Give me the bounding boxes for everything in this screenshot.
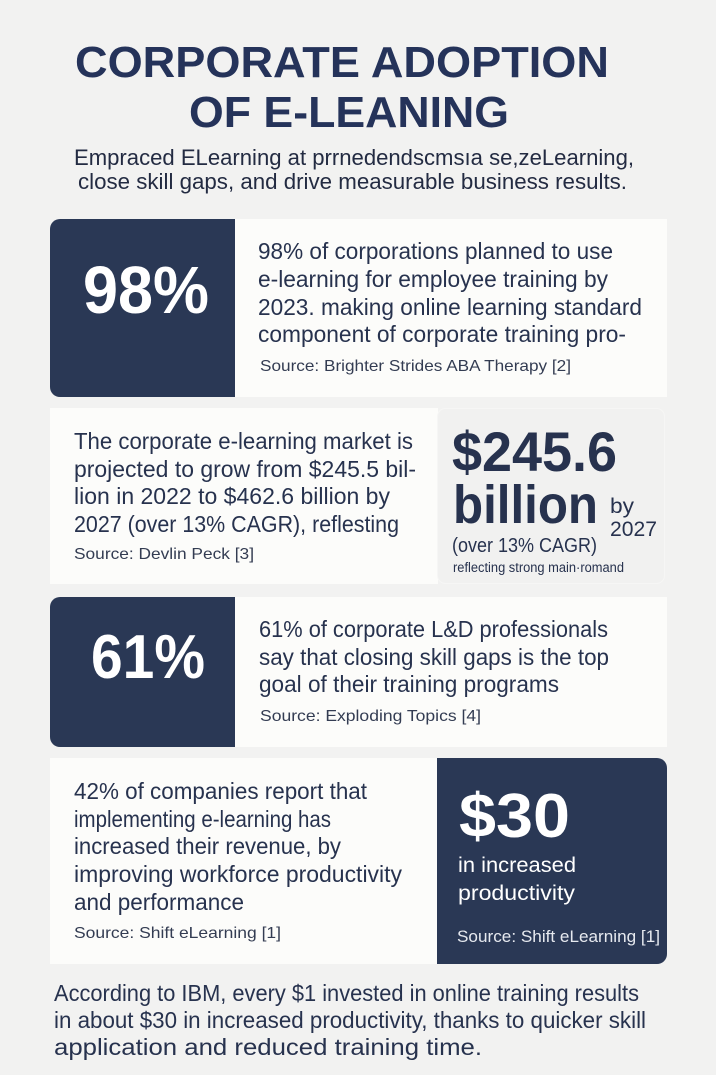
stat block: $245.6 billion: billion	[453, 475, 598, 535]
title	[75, 38, 609, 137]
text block: revenue description: implementing e-learning has	[74, 806, 331, 832]
stat block: $245.6 billion: by	[610, 495, 635, 518]
subtitle	[74, 145, 634, 194]
text block: 61% description: Source: Exploding Topics [4]	[260, 708, 481, 725]
footer text: application and reduced training time.	[54, 1034, 482, 1060]
text block: revenue description: and performance	[74, 889, 244, 915]
text block: 98% description: 98% of corporations planned to use	[258, 238, 613, 264]
footer text: According to IBM, every $1 invested in online training results	[54, 980, 639, 1006]
stat block: $30	[437, 758, 667, 964]
text block: revenue description	[74, 778, 402, 942]
text block: 98% description	[258, 238, 642, 375]
stat block: $245.6 billion: $245.6	[452, 420, 617, 483]
text block: 98% description: component of corporate training pro-	[258, 321, 626, 347]
stat block: $245.6 billion: 2027	[610, 518, 657, 541]
stat block: $245.6 billion: reflecting strong main·romand	[453, 560, 624, 575]
text block: 98% description: Source: Brighter Strides ABA Therapy [2]	[260, 358, 571, 375]
text block: market description: 2027 (over 13% CAGR), reflesting	[74, 511, 399, 537]
stat block: 61%	[50, 597, 235, 747]
text block: 61% description	[259, 616, 609, 725]
text block: revenue description: improving workforce productivity	[74, 861, 402, 887]
stat block: 98%	[50, 219, 235, 397]
stat block: $30: in increased	[458, 854, 576, 877]
subtitle: close skill gaps, and drive measurable business results.	[78, 169, 627, 194]
stat block: 61%: 61%	[91, 623, 205, 692]
panel: 61% stat	[50, 597, 667, 747]
text block: market description: The corporate e-learning market is	[74, 428, 413, 454]
text block: revenue description: increased their revenue, by	[74, 833, 341, 859]
panel: market growth	[50, 408, 664, 584]
text block: 61% description: 61% of corporate L&D professionals	[259, 616, 608, 642]
panel: 98% stat	[50, 219, 667, 397]
text block: market description: Source: Devlin Peck [3]	[74, 546, 254, 563]
panel: revenue and productivity	[50, 758, 667, 964]
footer text	[54, 980, 646, 1060]
text block: revenue description: Source: Shift eLearning [1]	[74, 925, 281, 942]
subtitle: Empraced ELearning at prrnedendscmsıa se,zeLearning,	[74, 145, 634, 170]
footer text: in about $30 in increased productivity, thanks to quicker skill	[54, 1007, 646, 1033]
stat block: $30: Source: Shift eLearning [1]	[457, 927, 660, 946]
stat block: $245.6 billion	[438, 408, 664, 584]
stat block: $30: productivity	[458, 882, 576, 905]
stat block: $245.6 billion: (over 13% CAGR)	[452, 535, 597, 557]
text block: 98% description: e-learning for employee training by	[258, 266, 608, 292]
stat block: 98%: 98%	[83, 253, 209, 328]
text block: 98% description: 2023. making online learning standard	[258, 294, 642, 320]
text block: market description: projected to grow from $245.5 bil-	[74, 456, 416, 482]
text block: revenue description: 42% of companies report that	[74, 778, 368, 804]
text block: 61% description: goal of their training programs	[259, 671, 559, 697]
text block: market description: lion in 2022 to $462.6 billion by	[74, 483, 390, 509]
stat block: $30: $30	[459, 782, 570, 851]
text block: market description	[74, 428, 416, 563]
title: OF E-LEANING	[189, 88, 509, 137]
title: CORPORATE ADOPTION	[75, 38, 609, 87]
text block: 61% description: say that closing skill gaps is the top	[259, 644, 609, 670]
